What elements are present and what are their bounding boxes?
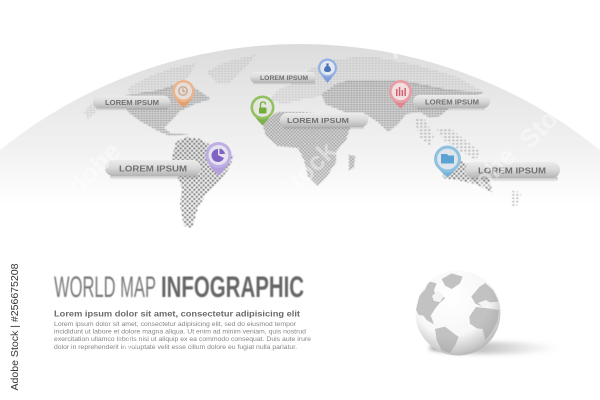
body text: Lorem ipsum dolor sit amet, consectetur adipisicing elit, sed do eiusmod tempor <box>54 321 297 328</box>
title: WORLD MAP <box>54 271 156 304</box>
icon: folder <box>441 154 454 164</box>
map: Philippines and New Guinea <box>436 128 480 160</box>
map: North America <box>122 82 211 136</box>
globe: North America ice patches <box>432 292 490 306</box>
title: INFOGRAPHIC <box>161 271 304 304</box>
label: lower right: LOREM IPSUM <box>478 166 546 176</box>
icon: pie chart <box>211 148 225 162</box>
globe shadow <box>429 342 561 354</box>
map: Alaska <box>84 104 97 119</box>
map: Madagascar <box>349 155 355 170</box>
label: top left: LOREM IPSUM <box>105 98 159 107</box>
pin: green padlock <box>250 96 274 126</box>
watermarks: Stock <box>513 83 585 154</box>
dotted world map <box>84 55 522 228</box>
background dome <box>0 44 600 205</box>
map: South America <box>172 137 234 228</box>
watermarks: Adobe Stock <box>208 135 342 269</box>
body text: dolor in reprehenderit in voluptate velit esse cillum dolore eu fugiat nulla pariatur. <box>54 344 297 351</box>
body text: incididunt ut labore et dolore magna aliqua. Ut enim ad minim veniam, quis nostrud <box>54 328 306 336</box>
label: top centre <box>250 72 316 85</box>
watermarks: Adobe Stock <box>263 265 397 399</box>
icon: bar chart <box>396 87 406 96</box>
icon: clock <box>179 87 187 95</box>
map: Indonesia and Australia <box>443 160 492 192</box>
label: lower right <box>465 162 560 182</box>
map: New Zealand <box>510 191 522 208</box>
globe: Greenland <box>442 273 463 289</box>
map: Africa <box>262 112 350 186</box>
pin: blue folder <box>434 146 461 178</box>
label: upper right: LOREM IPSUM <box>425 98 479 106</box>
icon: padlock <box>259 102 266 114</box>
label: lower left <box>105 160 201 180</box>
globe: South America <box>435 327 459 353</box>
globe: Africa <box>469 307 499 340</box>
map: South-East Asia <box>414 118 434 146</box>
pin: red bar chart <box>389 80 412 108</box>
body text: exercitation ullamco laboris nisi ut aliquip ex ea commodo consequat. Duis aute irure <box>54 336 311 343</box>
watermarks: Stock <box>73 328 145 399</box>
watermarks: Adobe <box>48 136 126 214</box>
watermarks: Adobe <box>443 141 521 219</box>
map: Southern Asia <box>322 80 484 132</box>
map: Greenland <box>207 55 255 84</box>
icon: money bag <box>324 64 331 72</box>
pin: orange clock <box>172 80 194 108</box>
globe: Europe <box>471 283 499 306</box>
map: Europe <box>270 60 336 104</box>
label: top left <box>93 96 170 111</box>
subheading: Lorem ipsum dolor sit amet, consectetur adipisicing elit <box>54 310 300 318</box>
label: upper right <box>413 95 490 111</box>
label: centre: LOREM IPSUM <box>287 116 349 125</box>
stock id vertical text: Adobe Stock | #256675208 <box>9 263 21 390</box>
label: lower left: LOREM IPSUM <box>119 164 187 174</box>
pin: purple pie chart <box>206 142 232 176</box>
map: Northern Asia <box>332 56 484 92</box>
label: top centre: LOREM IPSUM <box>260 75 309 82</box>
globe: North America <box>416 282 445 324</box>
map: Arctic Canada <box>128 63 196 96</box>
label: centre <box>280 113 368 130</box>
body text <box>54 321 311 351</box>
pin: blue money bag <box>318 58 337 83</box>
globe <box>416 270 500 356</box>
